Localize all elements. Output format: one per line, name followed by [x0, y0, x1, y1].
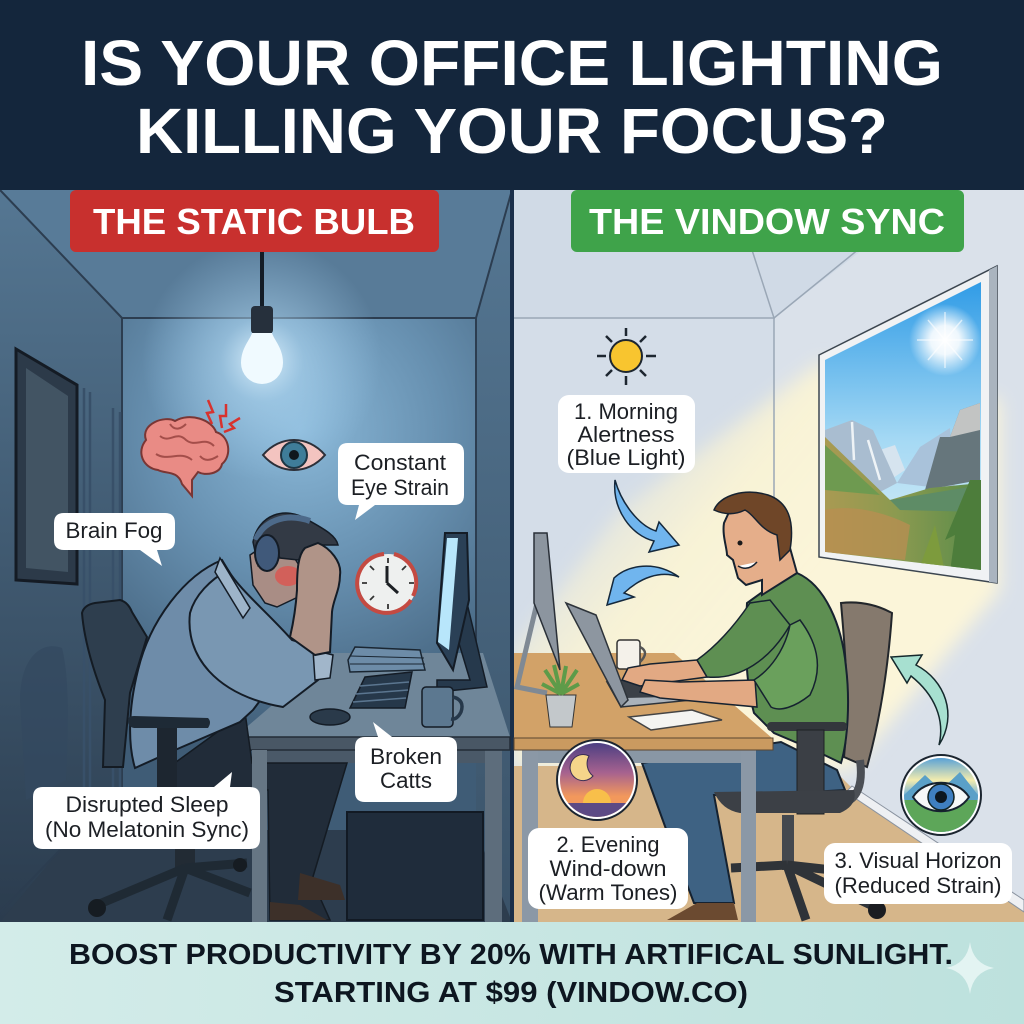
icon: hanging light bulb: [241, 252, 283, 384]
footer banner: [0, 922, 1024, 1024]
front desk leg: [252, 750, 267, 922]
icon: sun: [597, 328, 656, 385]
center divider: [510, 190, 514, 922]
monitor: [517, 533, 560, 693]
callout: visual horizon: (Reduced Strain): [834, 873, 1002, 898]
icon: eye horizon badge: [901, 755, 981, 835]
right desk: [514, 533, 773, 922]
title banner: KILLING YOUR FOCUS?: [136, 95, 888, 167]
title banner: IS YOUR OFFICE LIGHTING: [81, 27, 943, 99]
heading: the vindow sync: THE VINDOW SYNC: [589, 201, 945, 242]
mug: [617, 640, 645, 669]
icon: strained eye: [263, 440, 325, 470]
tired man figure: [128, 513, 347, 920]
footer banner: STARTING AT $99 (VINDOW.CO): [274, 977, 748, 1009]
callout: brain fog: [54, 513, 175, 566]
heading: the vindow sync: [571, 190, 964, 252]
icon: brain: [141, 400, 240, 496]
icon: broken clock: [357, 554, 417, 613]
callout: brain fog: Brain Fog: [66, 518, 162, 543]
callout: visual horizon: [824, 843, 1012, 904]
plant in pot: [542, 665, 579, 727]
callout: evening wind-down: Wind-down: [550, 856, 666, 881]
smiling man figure: [642, 492, 855, 920]
callout: broken catts: Broken: [370, 744, 442, 769]
callout: broken catts: [355, 722, 457, 802]
left desk: [235, 653, 510, 922]
smiling man arms and typing hands: [622, 600, 817, 709]
callout: disrupted sleep: (No Melatonin Sync): [45, 817, 249, 842]
right scene: the vindow sync room: [514, 190, 1024, 922]
callout: constant eye strain: [338, 443, 464, 520]
title banner: [0, 0, 1024, 190]
callout: evening wind-down: [528, 828, 688, 909]
arrow: down to person: [615, 480, 679, 552]
icon: sunset badge: [557, 740, 637, 820]
callout: constant eye strain: Eye Strain: [351, 475, 449, 500]
footer banner: BOOST PRODUCTIVITY BY 20% WITH ARTIFICAL SUNLIGHT.: [69, 939, 953, 971]
callout: morning alertness: Alertness: [578, 422, 674, 447]
tablet: [629, 710, 722, 730]
heading: the static bulb: THE STATIC BULB: [93, 201, 415, 242]
wall window display: [819, 266, 997, 583]
callout: morning alertness: (Blue Light): [566, 445, 686, 470]
right office chair: [731, 602, 892, 920]
callout: evening wind-down: (Warm Tones): [538, 880, 678, 905]
icon: sparkle: [946, 942, 994, 994]
callout: constant eye strain: Constant: [354, 450, 447, 475]
callout: disrupted sleep: [33, 772, 260, 849]
left office chair: [82, 600, 250, 920]
laptop: [566, 603, 712, 707]
callout: evening wind-down: 2. Evening: [556, 832, 660, 857]
left scene: the static bulb cubicle: [0, 190, 512, 922]
wall frames: [16, 349, 120, 800]
arrow: back to laptop: [607, 566, 679, 605]
callout: visual horizon: 3. Visual Horizon: [834, 848, 1002, 873]
callout: disrupted sleep: Disrupted Sleep: [66, 792, 228, 817]
callout: morning alertness: 1. Morning: [574, 399, 678, 424]
desk items: papers, keyboard, mouse, monitor, mug: [310, 533, 487, 727]
callout: morning alertness: [558, 395, 695, 473]
heading: the static bulb: [70, 190, 439, 252]
callout: broken catts: Catts: [380, 768, 432, 793]
arrow: teal curve up: [891, 655, 948, 745]
